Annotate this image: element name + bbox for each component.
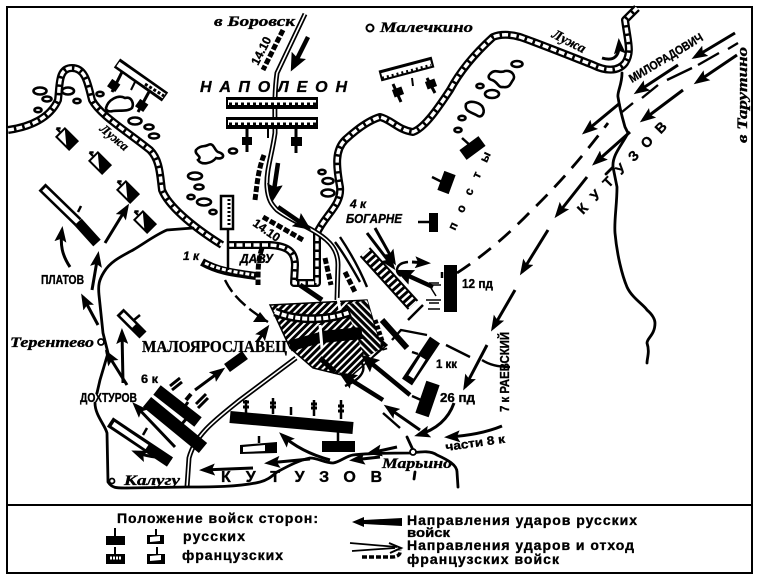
- legend icon: Russian reserve: [147, 529, 164, 544]
- label: Лужа west: Лужа: [96, 120, 133, 154]
- label: Калугу: Калугу: [123, 473, 180, 489]
- French corps: Beauharnais: [365, 252, 423, 320]
- forests and marsh groves: [34, 61, 522, 214]
- river Luzha: [8, 8, 637, 283]
- legend text: Russian attacks line two: войск: [407, 525, 451, 540]
- label: Платов: ПЛАТОВ: [41, 272, 84, 287]
- label: части 8 к: части 8 к: [444, 432, 507, 454]
- streams: [95, 73, 655, 488]
- French attack arrows: [273, 37, 427, 287]
- French withdrawal routes: [255, 30, 355, 292]
- legend icon: French solid: [106, 547, 125, 564]
- label: 1 кк: 1 кк: [436, 357, 458, 371]
- label: 7 к Раевский: 7 к РАЕВСКИЙ: [497, 332, 512, 412]
- Russian units: Kutuzov main line: [230, 398, 355, 454]
- Russian attack arrows: [61, 33, 738, 470]
- label: посты: посты: [445, 149, 494, 232]
- French corps: Davout: [202, 196, 268, 322]
- Russian units: Platov hollow formations: [42, 123, 157, 335]
- label: Марьино: Марьино: [381, 456, 452, 472]
- label: Богарне: БОГАРНЕ: [346, 211, 402, 226]
- label: 12 пд: 12 пд: [462, 276, 494, 291]
- label: Терентево: Терентево: [10, 335, 94, 351]
- label: Даву: ДАВУ: [239, 251, 274, 266]
- label: в Тарутино: в Тарутино: [735, 47, 751, 143]
- label: Малоярославец: МАЛОЯРОСЛАВЕЦ: [142, 337, 287, 356]
- label: Лужа east: Лужа: [548, 27, 588, 57]
- label: Малечкино: Малечкино: [379, 20, 473, 36]
- French corps: top left: [107, 63, 165, 112]
- legend text: French attacks: Направления ударов и отход: [407, 537, 634, 553]
- label: date south: 14.10: [250, 216, 283, 245]
- legend text: French attacks line two: французских войск: [407, 551, 560, 567]
- label: 4 к: 4 к: [349, 197, 367, 211]
- Russian units: Raevsky right flank: [382, 265, 470, 415]
- French corps: near Malechkino: [380, 62, 437, 102]
- legend text: Russian attacks: Направления ударов русских: [407, 512, 637, 528]
- Russian units: Dokhturov 6th corps: [110, 355, 245, 462]
- label: Кутузов east: КУТУЗОВ: [574, 118, 670, 217]
- Russian units: posts: [418, 138, 482, 232]
- label: в Боровск: в Боровск: [214, 14, 296, 30]
- legend text: Russian: русских: [183, 528, 245, 544]
- label: 26 пд: 26 пд: [440, 390, 476, 405]
- legend arrow: Russian attacks: [352, 517, 402, 527]
- label: Наполеон: НАПОЛЕОН: [200, 79, 347, 96]
- label: date north: 14.10: [248, 34, 274, 67]
- label: 6 к: 6 к: [141, 372, 159, 386]
- French corps: Napoleon: [226, 97, 318, 153]
- settlement markers: [98, 24, 416, 484]
- roads: [187, 14, 338, 487]
- legend icon: Russian solid: [106, 528, 125, 545]
- label: Кутузов south: КУТУЗОВ: [221, 469, 382, 486]
- legend heading: Положение войск сторон:: [117, 510, 318, 526]
- label: Дохтуров: ДОХТУРОВ: [80, 390, 137, 405]
- legend: [106, 510, 637, 567]
- label: 1 к: 1 к: [183, 249, 200, 263]
- legend icon: French reserve: [147, 547, 165, 564]
- legend text: French: французских: [182, 547, 283, 563]
- fortified town Maloyaroslavets: [270, 285, 387, 377]
- legend arrow: French attacks and retreat: [350, 543, 401, 557]
- label: Милорадович: МИЛОРАДОВИЧ: [626, 30, 706, 86]
